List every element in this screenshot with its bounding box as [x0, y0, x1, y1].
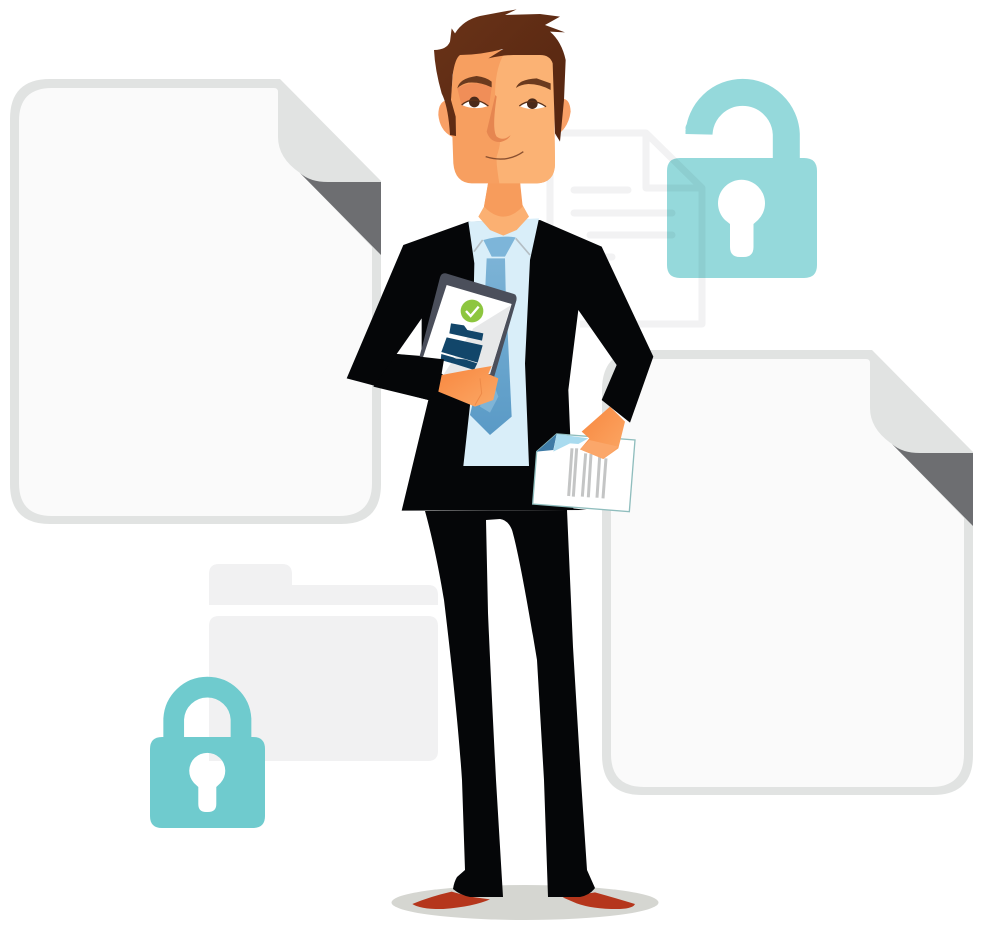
- icon: navy folder stack: [441, 323, 483, 370]
- neck: [478, 182, 529, 236]
- trousers: [425, 510, 595, 897]
- tablet: [419, 273, 517, 377]
- shirt: [463, 218, 539, 466]
- icon: green check: [461, 300, 483, 322]
- hand: holding paper: [580, 407, 625, 459]
- page curl shadow: [300, 173, 381, 255]
- paper with barcode: [533, 434, 635, 512]
- arm gap: white triangle: [397, 318, 422, 356]
- document: left: [10, 79, 381, 524]
- head: [434, 9, 571, 236]
- ghost document: top centre: [550, 133, 702, 327]
- hand: holding tablet: [438, 366, 498, 407]
- tie: [470, 237, 516, 435]
- ground shadow: [392, 885, 658, 920]
- icon: closed padlock: [150, 687, 265, 828]
- mouth: [486, 152, 523, 159]
- eyes: [462, 97, 546, 109]
- ears: [438, 100, 453, 137]
- collar shadow lines: [474, 238, 530, 255]
- torso group: [347, 218, 653, 512]
- eye socket shade: [457, 83, 492, 107]
- document: right: [602, 350, 973, 795]
- businessman: [347, 9, 653, 909]
- barcode lines: [569, 448, 606, 498]
- shoes: [412, 892, 635, 909]
- face: [451, 50, 555, 183]
- hair: [434, 9, 566, 142]
- eyebrows: [457, 76, 551, 90]
- jacket: [347, 220, 653, 511]
- icon: open padlock: [667, 92, 817, 278]
- ghost folder: [209, 564, 438, 761]
- page curl shadow right: [892, 444, 973, 526]
- jacket sleeve over tablet: [373, 354, 444, 400]
- nose shadow: [487, 95, 511, 142]
